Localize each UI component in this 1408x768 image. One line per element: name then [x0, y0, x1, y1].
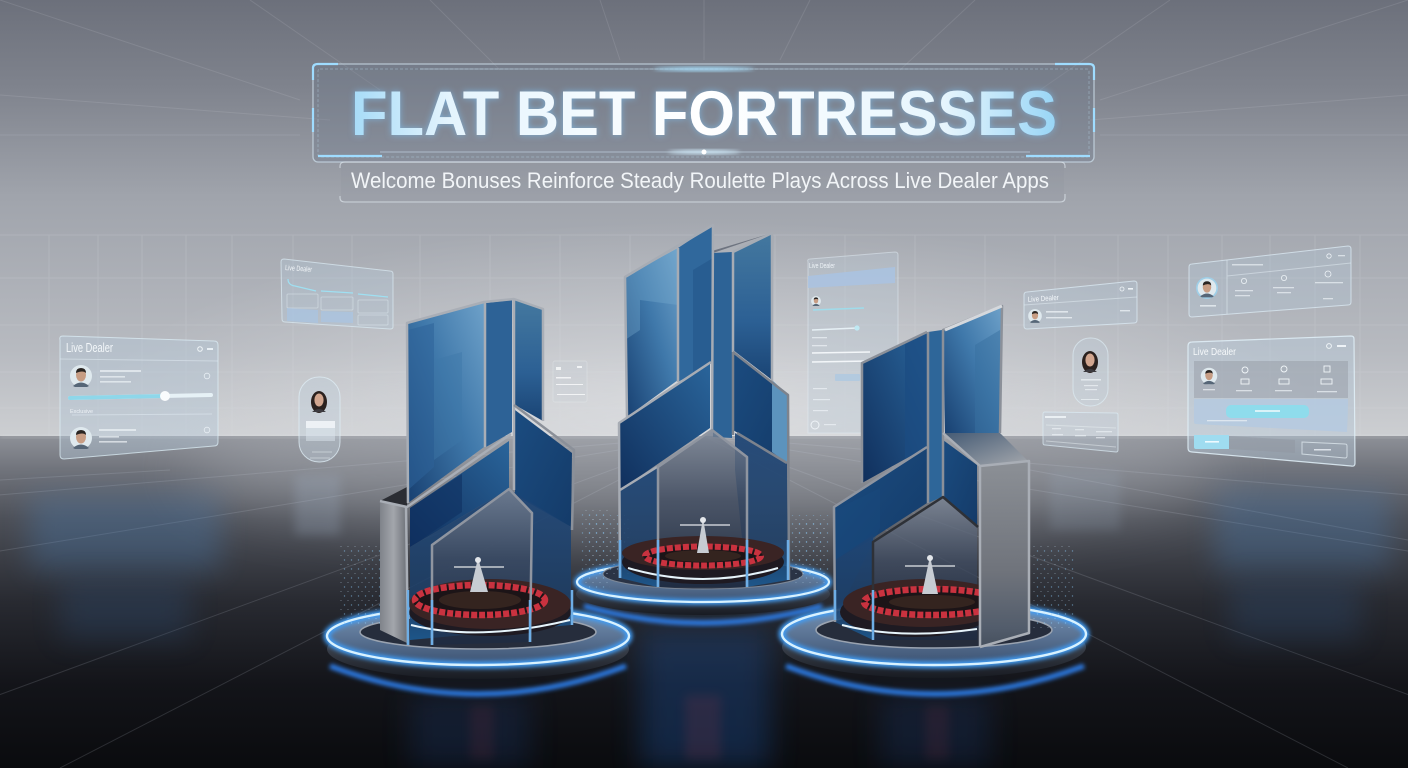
slider: [70, 395, 211, 398]
panel: dealer portrait card, left: [299, 377, 340, 462]
roulette wheel: [840, 555, 1007, 637]
data particles: [340, 545, 380, 625]
panel: live dealer slider, left: [60, 336, 218, 459]
panel: dealer portrait card, right: [1073, 338, 1108, 406]
title banner: [313, 64, 1094, 162]
tall glass walls: [835, 306, 1002, 640]
panel: live dealer slider, left: Live Dealer: [66, 340, 113, 355]
claim button: [1226, 405, 1309, 418]
panel: live dealer table grid: [281, 259, 393, 329]
glass house: [873, 498, 977, 640]
panel: live dealer bonus, bottom right: Live Dealer: [1193, 346, 1236, 358]
tall glass walls: [618, 225, 788, 587]
tower group: centre fortress: [576, 225, 830, 623]
panel: live dealer bonus, bottom right: [1188, 336, 1355, 466]
steel side wall: [380, 501, 407, 643]
platform: right: [782, 603, 1086, 694]
tower group: left fortress: [327, 299, 629, 694]
floor reflections: [30, 470, 1390, 768]
title text: FLAT BET FORTRESSES: [351, 79, 1057, 149]
panel: live dealer controls, centre right: [808, 252, 898, 433]
platform: centre: [576, 559, 830, 623]
tall glass walls: [380, 300, 572, 640]
roulette wheel: [622, 517, 784, 584]
panel: live dealer small, right: [1024, 281, 1137, 329]
panel: dealer profile, top right: [1189, 246, 1351, 317]
roulette wheel: [409, 557, 571, 636]
glass house: [432, 489, 532, 645]
steel frame: [834, 306, 1029, 647]
data particles: [587, 515, 631, 575]
data particles: [1032, 545, 1074, 630]
glass house: [658, 430, 747, 587]
floor: [0, 405, 1408, 768]
panel: small table card, right: [1043, 412, 1118, 452]
steel frame: [380, 299, 574, 645]
panel: small stat card: [553, 361, 587, 402]
platform: left: [327, 607, 629, 694]
second dealer avatar: [70, 427, 92, 449]
panel: live dealer small, right: Live Dealer: [1028, 293, 1059, 304]
steel roof: [943, 433, 1028, 466]
panel: live dealer controls, centre right: Live Dealer: [809, 263, 835, 270]
subtitle: Welcome Bonuses Reinforce Steady Roulette Plays Across Live Dealer Apps: [351, 168, 1049, 193]
panel: live dealer slider, left: Exclusive: [70, 409, 93, 415]
tower group: right fortress: [782, 306, 1086, 694]
dealer avatar: [70, 365, 92, 387]
front steel wall over wheel: [980, 461, 1029, 647]
panel: live dealer table grid: Live Dealer: [285, 263, 313, 274]
steel frame: [619, 225, 789, 587]
subtitle: [340, 162, 1065, 202]
